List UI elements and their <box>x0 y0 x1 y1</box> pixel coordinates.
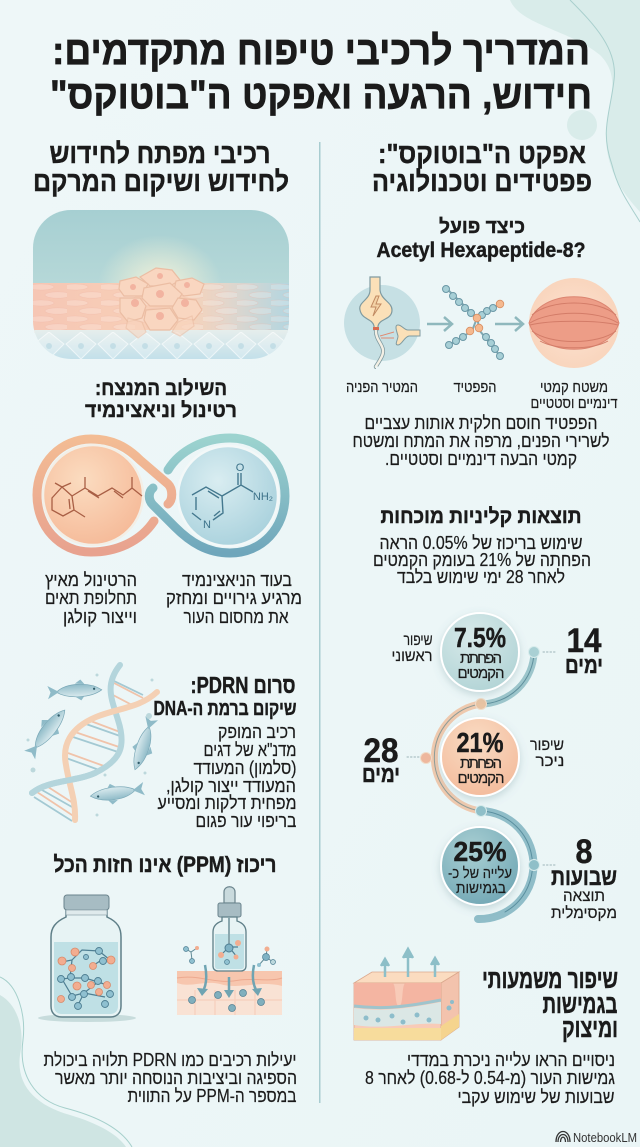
label: noticeable improvement: שיפור <box>530 737 564 754</box>
text: clinical summary <box>373 533 591 587</box>
icon: dropper bottle over skin <box>177 887 282 1015</box>
stat: 25% at 8 weeks: בגמישות <box>456 880 506 897</box>
icon: peptide chain <box>442 286 504 360</box>
text: retinol description <box>45 570 137 627</box>
heading: botox effect column: אפקט ה"בוטוקס": <box>378 138 586 169</box>
heading: renewal column: רכיבי מפתח לחידוש <box>50 138 270 169</box>
stat: 21% at 28 days: הקמטים <box>458 770 504 787</box>
text: PDRN description: מדנ"א של דגים <box>204 740 296 760</box>
text: clinical summary: לאחר 28 ימי שימוש בלבד <box>397 567 565 587</box>
band: niacinamide loop <box>149 438 285 553</box>
heading: PDRN serum: סרום PDRN: <box>190 672 296 698</box>
text: PDRN description: בריפוי עור פגום <box>196 811 297 831</box>
timeline track <box>407 646 555 919</box>
label: 28 days: 28 <box>364 732 398 770</box>
icon: skin block with upward arrows <box>354 949 459 1040</box>
stat: 7.5% at 14 days: הפחתת <box>460 650 502 667</box>
stat: 25% at 8 weeks: 25% <box>454 836 507 867</box>
salmon <box>47 678 102 702</box>
molecule: niacinamide: NH₂ <box>253 491 273 503</box>
molecule: niacinamide: N <box>203 519 211 531</box>
text: PDRN description: מפחית דלקות ומסייע <box>158 793 296 813</box>
text: PPM explanation: יעילות רכיבים כמו PDRN תלויה ביכולת <box>44 1050 296 1070</box>
illustration: DNA helix and salmon <box>20 665 163 821</box>
icon: large jar of molecules <box>38 895 136 1022</box>
text: mechanism explanation: הפפטיד חוסם חלקית אותות עצביים <box>364 413 598 433</box>
labels: mechanism: דינמיים וסטטיים <box>530 395 618 412</box>
arrow: nerve to peptide <box>427 317 452 331</box>
heading: renewal column <box>33 138 289 197</box>
labels: mechanism: הפפטיד <box>454 379 496 396</box>
heading: botox effect column <box>372 138 592 197</box>
label: 8 weeks maximum result <box>551 833 617 922</box>
text: retinol description: הרטינול מאיץ <box>45 570 137 590</box>
text: clinical summary: הפחתה של 21% בעומק הקמטים <box>373 550 591 570</box>
labels: mechanism: משטח קמטי <box>540 379 608 396</box>
text: niacinamide description: את מחסום העור <box>184 607 289 627</box>
title: המדריך לרכיבי טיפוח מתקדמים: <box>52 29 590 73</box>
decoration: bottom left blob <box>0 977 132 1147</box>
text: clinical summary: שימוש בריכוז של 0.05% הראה <box>380 533 582 553</box>
heading: clinical results: תוצאות קליניות מוכחות <box>380 505 582 528</box>
molecule: niacinamide <box>178 446 278 546</box>
heading: botox effect column: פפטידים וטכנולוגיה <box>372 166 592 197</box>
label: first improvement: שיפור <box>404 632 432 649</box>
label: 28 days: ימים <box>362 761 400 787</box>
subheading: how Acetyl Hexapeptide-8 works: Acetyl Hexapeptide-8? <box>376 239 586 262</box>
stat: 7.5% at 14 days <box>441 613 519 691</box>
text: niacinamide description <box>166 570 302 627</box>
diagram: retinol and niacinamide loop <box>37 438 285 553</box>
column divider <box>319 142 320 1103</box>
label: 14 days: ימים <box>565 652 603 678</box>
heading: PPM concentration: ריכוז (PPM) אינו חזות הכל <box>54 852 276 877</box>
illustration: skin renewal panel <box>33 210 289 359</box>
text: PDRN description: רכיב המופק <box>218 722 296 742</box>
cell cluster <box>119 268 204 338</box>
heading: renewal column: לחידוש ושיקום המרקם <box>33 166 289 197</box>
stat: 25% at 8 weeks: עלייה של כ- <box>448 865 512 882</box>
text: retinol description: וייצור קולגן <box>63 607 137 627</box>
label: noticeable improvement: ניכר <box>536 753 564 770</box>
icon: relaxed muscle <box>529 278 619 368</box>
subheading: how Acetyl Hexapeptide-8 works: כיצד פועל <box>439 216 525 238</box>
label: 8 weeks maximum result: תוצאה <box>563 888 605 905</box>
heading: PDRN serum: שיקום ברמת ה-DNA <box>153 698 296 720</box>
label: 8 weeks maximum result: 8 <box>576 833 592 871</box>
text: PDRN description: המעודד ייצור קולגן, <box>166 776 296 796</box>
label: first improvement: ראשוני <box>392 648 432 665</box>
text: PDRN description <box>158 722 297 831</box>
heading: PDRN serum <box>153 672 296 720</box>
title <box>50 29 592 117</box>
label: 14 days <box>565 622 603 678</box>
stat: 21% at 28 days: 21% <box>456 727 504 758</box>
heading: winning combination: השילוב המנצח: <box>95 377 227 400</box>
molecule: niacinamide: O <box>236 462 245 474</box>
orange strand <box>65 692 157 820</box>
heading: winning combination <box>85 377 237 422</box>
text: firmness explanation: ניסויים הראו עלייה ניכרת במדדי <box>407 1050 615 1070</box>
heading: firmness improvement: ומיצוק <box>562 1013 618 1043</box>
text: PPM explanation <box>44 1050 297 1106</box>
text: firmness explanation: שבועות של שימוש עקבי <box>458 1087 614 1107</box>
label: noticeable improvement <box>530 737 564 770</box>
text: niacinamide description: בעוד הניאצינמיד <box>182 570 292 590</box>
skin layers <box>177 971 282 1015</box>
text: PPM explanation: במספר ה-PPM על התווית <box>127 1086 297 1106</box>
heading: winning combination: רטינול וניאצינמיד <box>85 399 237 422</box>
label: 8 weeks maximum result: שבועות <box>551 864 617 891</box>
text: mechanism explanation <box>352 413 610 469</box>
labels: mechanism <box>346 379 618 412</box>
blue strand <box>32 665 122 793</box>
label: 14 days: 14 <box>566 622 602 660</box>
text: mechanism explanation: קמטי הבעה דינמיים וסטטיים. <box>385 449 577 469</box>
helix rungs <box>34 680 143 821</box>
heading: firmness improvement <box>482 964 618 1043</box>
text: PPM explanation: הספיגה וביציבות הנוסחה יותר מאשר <box>55 1068 297 1088</box>
band: retinol loop <box>37 439 172 552</box>
molecule: retinol <box>43 445 143 545</box>
text: firmness explanation <box>365 1050 615 1107</box>
label: first improvement <box>392 632 432 665</box>
title: חידוש, הרגעה ואפקט ה"בוטוקס" <box>50 73 592 117</box>
stat: 21% at 28 days: הפחתת <box>460 755 502 772</box>
labels: mechanism: המטיר הפניה <box>346 379 418 396</box>
decoration: top right blob <box>510 0 640 222</box>
stat: 7.5% at 14 days: הקמטים <box>458 665 504 682</box>
stat: 25% at 8 weeks <box>441 827 519 905</box>
subheading: how Acetyl Hexapeptide-8 works <box>376 216 586 262</box>
text: firmness explanation: גמישות העור (מ-0.54 ל-0.68) לאחר 8 <box>365 1068 615 1088</box>
timeline chart <box>362 613 617 922</box>
stat: 7.5% at 14 days: 7.5% <box>454 622 506 653</box>
icon: nerve synapse <box>344 277 420 367</box>
arrow: peptide to muscle <box>495 317 523 331</box>
stat: 21% at 28 days <box>441 718 519 796</box>
label: 28 days <box>362 732 400 787</box>
text: retinol description: תחלופת תאים <box>45 588 137 608</box>
label: 8 weeks maximum result: מקסימלית <box>551 904 617 922</box>
text: niacinamide description: מרגיע גירויים ומחזק <box>166 588 302 608</box>
text: PDRN description: (סלמון) המעודד <box>194 758 296 778</box>
text: mechanism explanation: לשרירי הפנים, מרפה את המתח ומשטח <box>352 431 610 451</box>
